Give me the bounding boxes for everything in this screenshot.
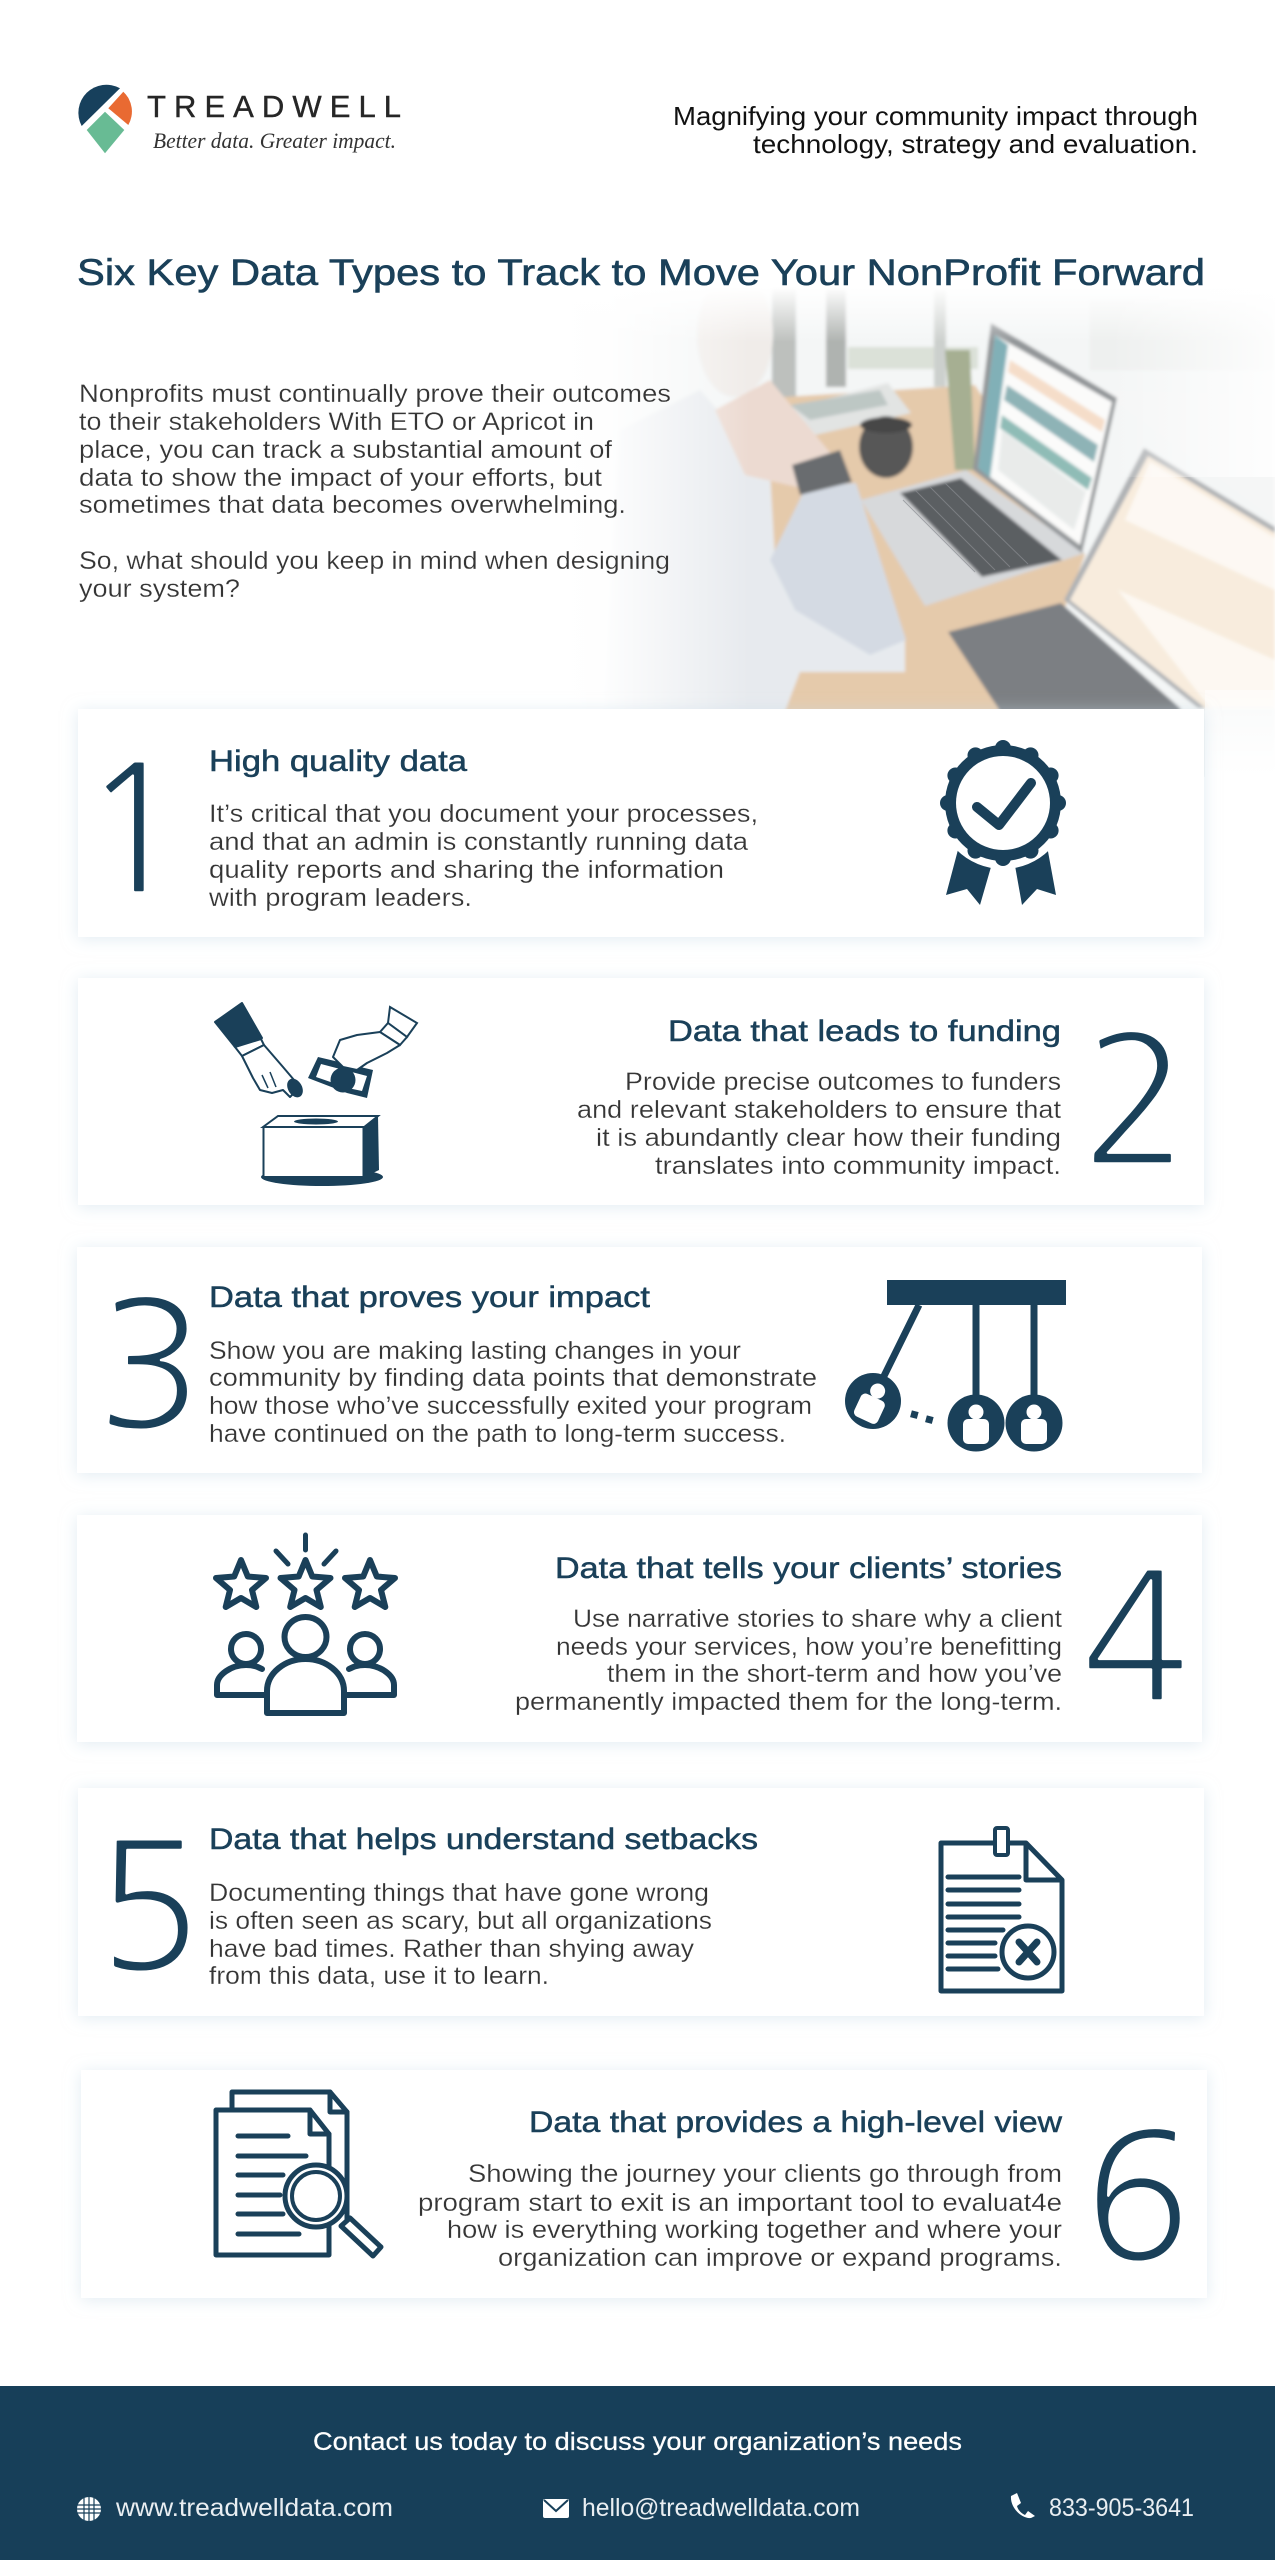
header tagline: Magnifying your community impact through [673,101,1198,131]
logo mark [78,85,132,153]
body 4 [515,1605,1062,1716]
body 6: program start to exit is an important tool to evaluat4e [418,2189,1062,2217]
panel: 1 high quality data [78,709,1204,937]
intro text: data to show the impact of your efforts, but [79,464,602,492]
intro text: Nonprofits must continually prove their outcomes [79,380,671,408]
body 3: community by finding data points that demonstrate [209,1364,817,1392]
body 1: It’s critical that you document your processes, [209,800,758,828]
body 1: and that an admin is constantly running data [209,828,748,856]
body 2: and relevant stakeholders to ensure that [577,1096,1061,1124]
heading 2: Data that leads to funding [668,1015,1061,1048]
header tagline [673,101,1198,159]
body 3 [209,1337,817,1448]
heading 1: High quality data [209,745,467,778]
laptop keyboard keys [903,483,1028,572]
phone number: 833-905-3641 [1049,2494,1194,2522]
number 4: 4 [1082,1550,1189,1726]
panel: 4 data that tells your clients' stories [77,1515,1202,1742]
body 2 [577,1068,1061,1180]
body 6: how is everything working together and where your [447,2216,1062,2244]
icon: newton's cradle with people [845,1280,1066,1452]
panel: 5 data that helps understand setbacks [78,1788,1204,2016]
icon: award ribbon with check [937,737,1069,905]
body 3: have continued on the path to long-term success. [209,1420,786,1448]
body 5: have bad times. Rather than shying away [209,1935,695,1963]
icon: document with error mark [941,1828,1062,1991]
website: www.treadwelldata.com [115,2494,393,2522]
photo fade: left [561,328,720,709]
body 4: permanently impacted them for the long-term. [515,1688,1062,1716]
email: hello@treadwelldata.com [582,2494,860,2522]
number 2: 2 [1082,1013,1189,1189]
body 6: organization can improve or expand programs. [498,2244,1062,2272]
body 6: Showing the journey your clients go through from [468,2160,1062,2188]
body 3: how those who’ve successfully exited your program [209,1392,812,1420]
photo fade: bottom right [1205,700,1274,776]
photo fade: top [702,287,1173,338]
footer heading: Contact us today to discuss your organization’s needs [313,2428,962,2456]
body 5: Documenting things that have gone wrong [209,1879,709,1907]
number 3: 3 [97,1278,204,1454]
body 2: Provide precise outcomes to funders [625,1068,1061,1096]
icon: envelope [543,2499,569,2518]
photo: person working at laptop and tablet [645,292,1275,724]
body 1: quality reports and sharing the information [209,856,724,884]
heading 6: Data that provides a high-level view [529,2106,1062,2139]
logo [78,85,401,153]
number 1: 1 [80,742,187,918]
body 5: from this data, use it to learn. [209,1962,549,1990]
body 4: needs your services, how you’re benefitting [556,1633,1062,1661]
body 4: Use narrative stories to share why a client [573,1605,1062,1633]
body 2: it is abundantly clear how their funding [596,1124,1061,1152]
icon: rating stars over group of people [216,1535,395,1713]
body 4: them in the short-term and how you’ve [607,1660,1062,1688]
icon: phone [1011,2493,1035,2518]
panel: 2 data that leads to funding [78,978,1204,1205]
icon: documents with magnifying glass [216,2092,381,2256]
logo tagline: Better data. Greater impact. [153,128,396,153]
panel: 6 data that provides a high-level view [81,2070,1207,2298]
title: Six Key Data Types to Track to Move Your NonProfit Forward [77,252,1205,293]
intro text: your system? [79,575,240,603]
intro text: place, you can track a substantial amount of [79,436,612,464]
body 1: with program leaders. [208,884,472,912]
header tagline: technology, strategy and evaluation. [753,129,1198,159]
logo wordmark: TREADWELL [147,89,401,124]
photo fade: right [1132,320,1274,477]
footer [0,2386,1275,2560]
heading 4: Data that tells your clients’ stories [555,1552,1062,1585]
panel: 3 data that proves your impact [77,1247,1202,1473]
intro text: So, what should you keep in mind when designing [79,547,670,575]
heading 3: Data that proves your impact [209,1281,651,1314]
heading 5: Data that helps understand setbacks [209,1823,758,1856]
body 3: Show you are making lasting changes in your [209,1337,741,1365]
intro text: to their stakeholders With ETO or Apricot in [79,408,594,436]
intro text [79,380,671,603]
body 2: translates into community impact. [655,1152,1061,1180]
body 5: is often seen as scary, but all organizations [209,1907,712,1935]
number 6: 6 [1084,2110,1191,2286]
number 5: 5 [95,1820,202,1996]
body 5 [209,1879,712,1990]
icon: hands putting money in donation box [215,1003,417,1186]
body 1 [208,800,758,912]
icon: globe [77,2497,101,2521]
intro text: sometimes that data becomes overwhelming. [79,491,626,519]
body 6 [418,2160,1062,2272]
